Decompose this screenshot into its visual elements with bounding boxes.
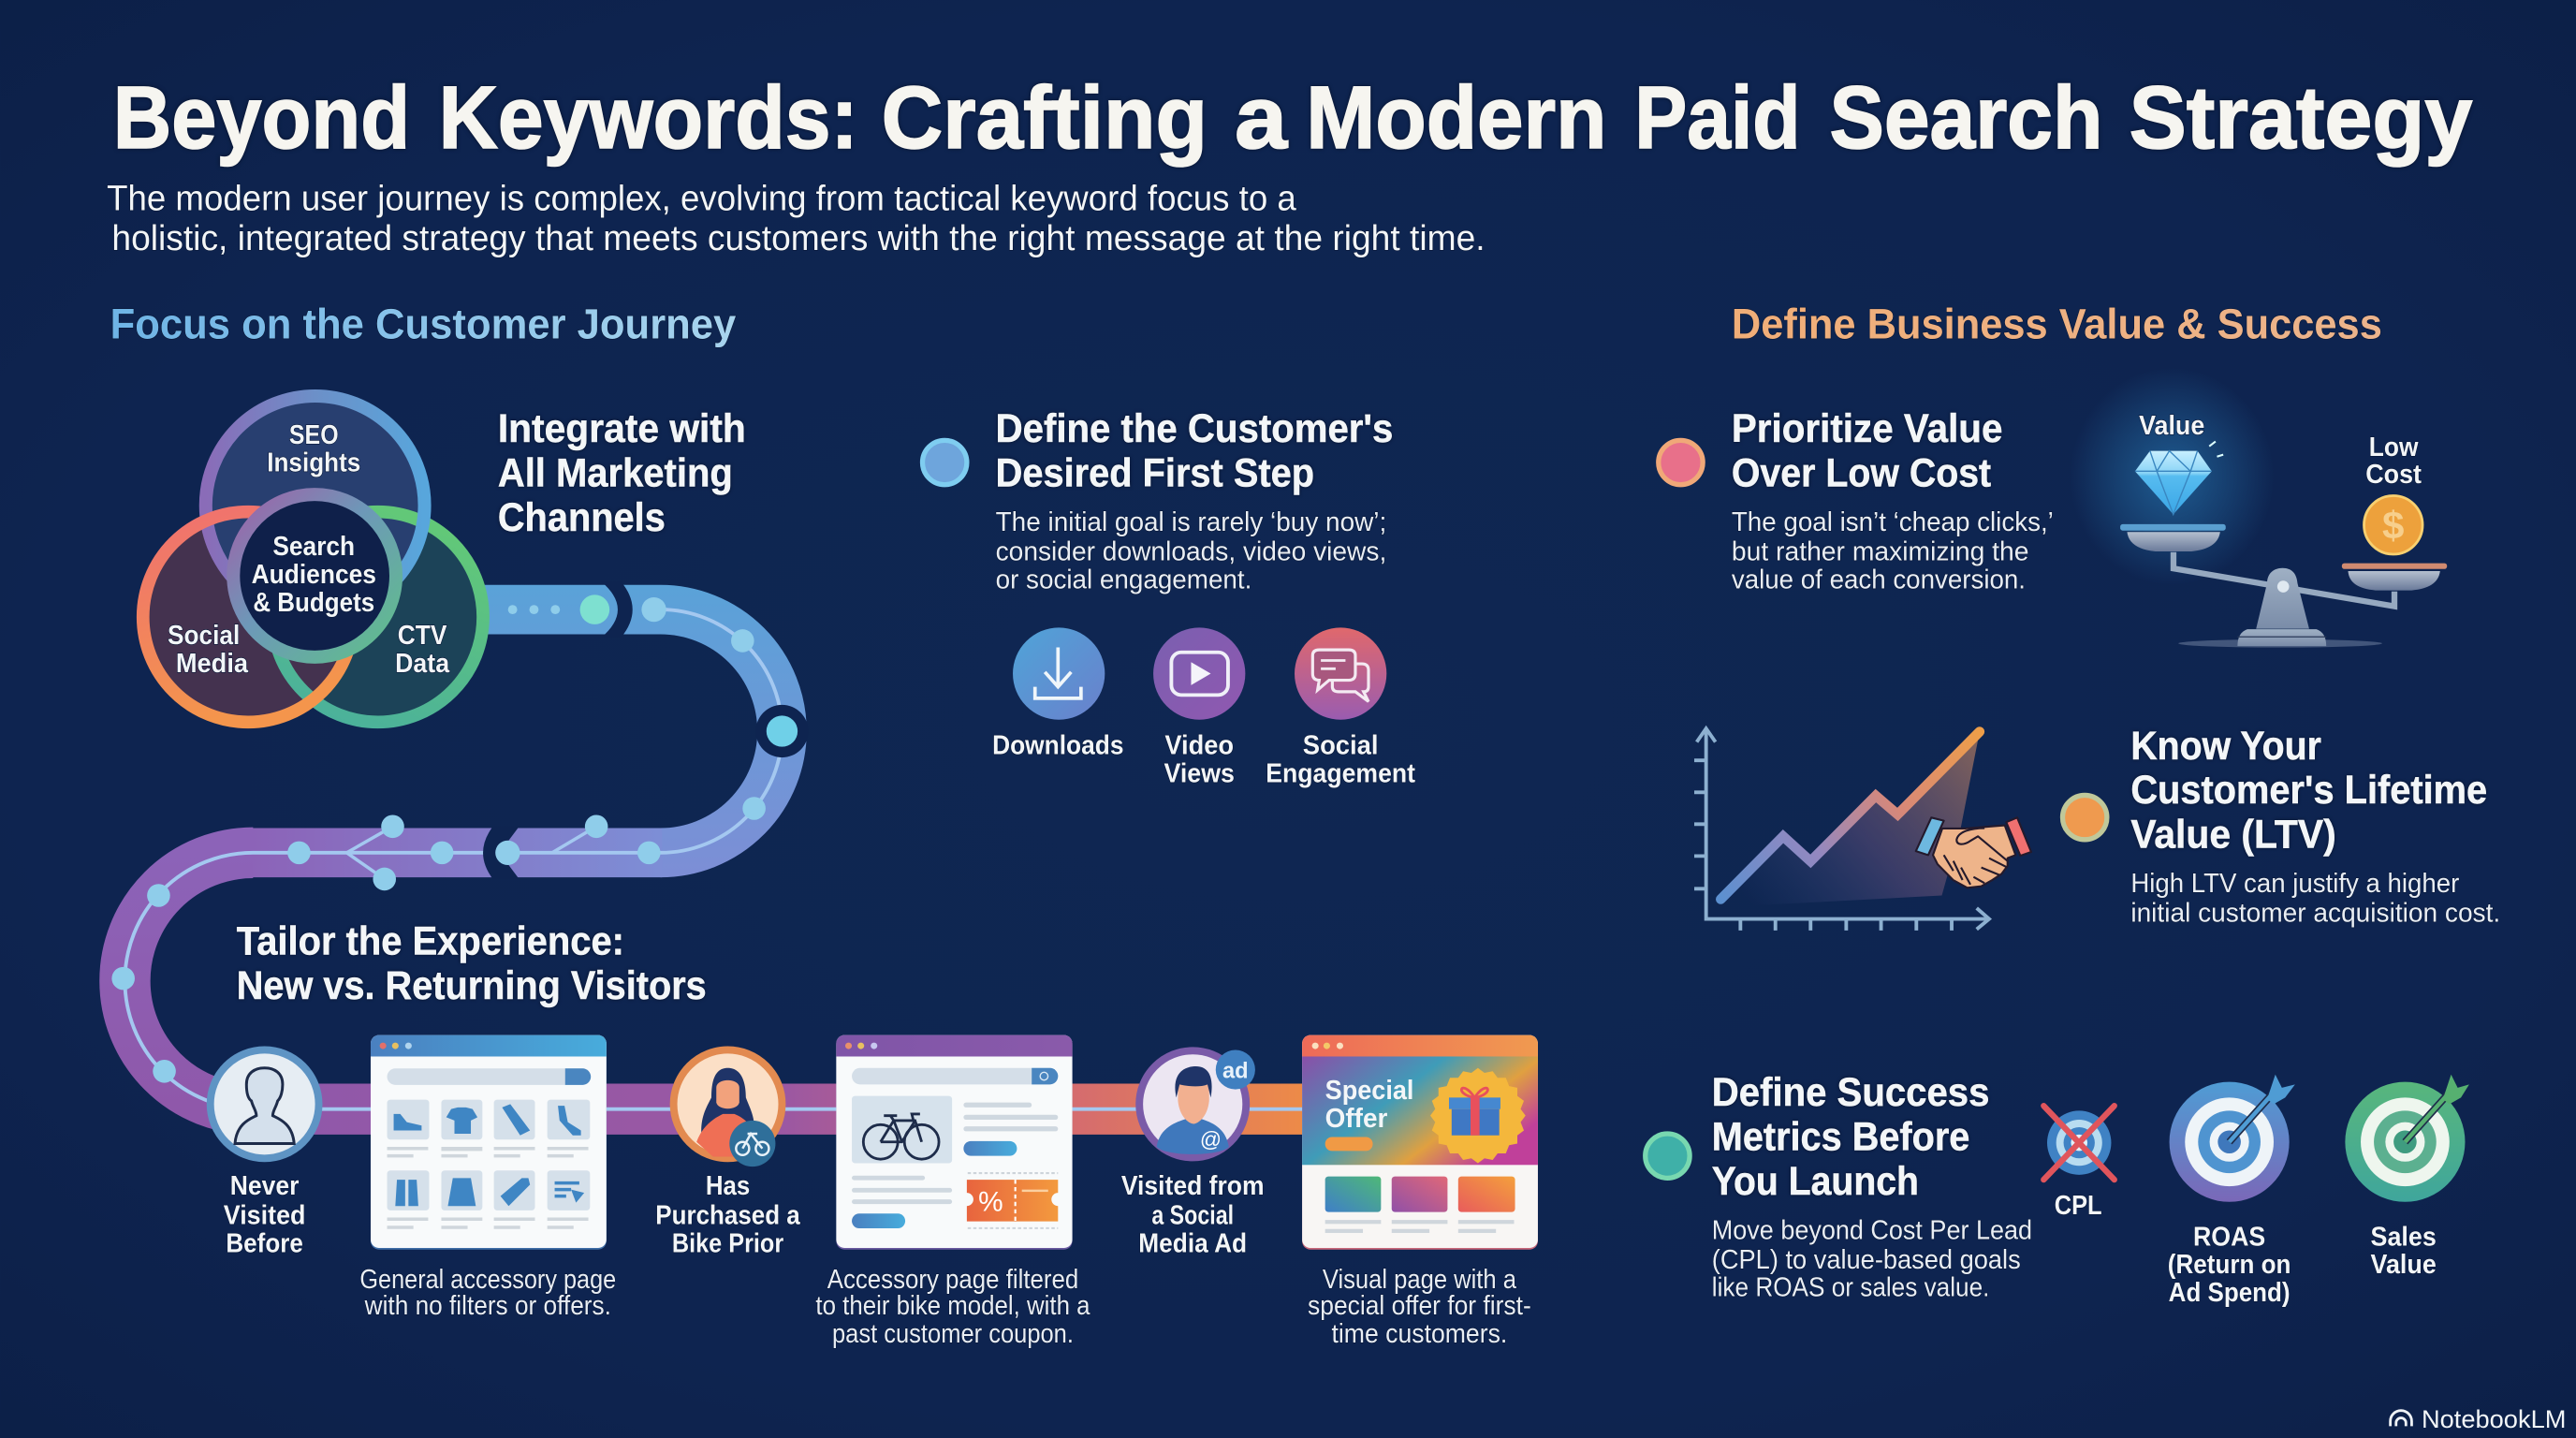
logo: NotebookLM: NotebookLM	[2422, 1404, 2566, 1433]
caption: special offer page: time customers.	[1332, 1319, 1507, 1349]
venn labels: Insights	[267, 448, 360, 478]
label: ROAS: ROAS	[2193, 1222, 2265, 1252]
bullet: first step	[923, 440, 967, 485]
heading: metrics: You Launch	[1712, 1159, 1919, 1204]
scale labels: Low	[2369, 433, 2419, 462]
avatar: new visitor	[211, 1049, 319, 1158]
body: ltv: High LTV can justify a higher	[2130, 869, 2459, 899]
icon: crossed-out target	[2043, 1106, 2115, 1180]
body: first step	[996, 507, 1386, 594]
heading: customer journey: Focus on the Customer Journey	[110, 301, 737, 348]
icon: balance scale	[2070, 368, 2447, 648]
body: first step: The initial goal is rarely ‘buy now’;	[996, 507, 1386, 537]
venn labels: SEO	[289, 420, 339, 450]
label: purchased: Purchased a	[655, 1200, 800, 1230]
title: Paid	[1634, 68, 1801, 168]
body: metrics: like ROAS or sales value.	[1712, 1273, 1989, 1303]
label: social ad: Visited from	[1121, 1171, 1265, 1201]
subtitle: holistic, integrated strategy that meets customers with the right message at the right time.	[111, 218, 1486, 257]
label: purchased: Has	[706, 1171, 750, 1201]
heading: metrics	[1712, 1070, 1989, 1204]
subtitle: The modern user journey is complex, evolving from tactical keyword focus to a	[107, 179, 1296, 218]
card: filtered page	[836, 1035, 1073, 1250]
heading: metrics: Metrics Before	[1712, 1115, 1969, 1160]
heading: first step: Define the Customer's	[996, 406, 1393, 451]
venn labels: Data	[395, 649, 449, 679]
heading: first step: Desired First Step	[996, 450, 1314, 495]
chart: rising value	[1694, 728, 2031, 931]
venn diagram: marketing channels	[143, 396, 483, 722]
label: sales value	[2371, 1222, 2437, 1280]
venn labels: Media	[176, 649, 248, 679]
card: special offer page	[1302, 1035, 1538, 1250]
diamond	[2135, 442, 2223, 514]
icon: sales value target	[2345, 1075, 2469, 1202]
body: metrics: Move beyond Cost Per Lead	[1712, 1215, 2032, 1245]
venn labels: Audiences	[252, 560, 376, 590]
icon labels: Engagement	[1266, 758, 1416, 788]
label: never visited: Before	[226, 1228, 303, 1258]
title	[113, 68, 2473, 168]
venn labels: Social	[168, 621, 240, 651]
coupon percent: %	[978, 1186, 1003, 1217]
venn labels: Search	[272, 532, 355, 562]
label: social ad	[1121, 1171, 1265, 1258]
panel: prioritize value	[1659, 368, 2447, 648]
label: purchased	[655, 1171, 800, 1258]
body: prioritize	[1732, 507, 2054, 594]
heading: ltv: Customer's Lifetime	[2130, 768, 2487, 813]
icon: social engagement	[1295, 627, 1386, 720]
icon: handshake	[1916, 817, 2031, 888]
title: Keywords:	[439, 68, 858, 168]
caption: general page: General accessory page	[359, 1265, 616, 1295]
title: Beyond	[113, 68, 410, 168]
heading: integrate: Integrate with	[498, 406, 746, 451]
icon labels: Social	[1303, 731, 1379, 761]
label: CPL: CPL	[2055, 1191, 2102, 1221]
bullet: ltv	[2062, 795, 2107, 840]
avatar: social visitor	[1139, 1049, 1255, 1157]
label: ROAS: (Return on	[2168, 1250, 2291, 1280]
coin: $	[2382, 504, 2404, 548]
scale labels: Value	[2139, 411, 2204, 441]
ring: CTV	[272, 512, 483, 722]
panel: success metrics	[1646, 1070, 2469, 1308]
heading: integrate: All Marketing	[498, 450, 733, 495]
heading: ltv: Know Your	[2130, 724, 2321, 769]
body: first step: or social engagement.	[996, 565, 1251, 594]
caption: special offer page: special offer for first-	[1308, 1291, 1531, 1321]
venn labels	[168, 420, 449, 679]
venn labels: & Budgets	[253, 588, 374, 618]
ring: social	[143, 512, 353, 722]
caption: filtered page: Accessory page filtered	[827, 1265, 1078, 1295]
label: social ad: Media Ad	[1138, 1228, 1247, 1258]
circle: search core	[233, 494, 396, 657]
special offer text	[1325, 1076, 1413, 1134]
icon: ROAS target	[2170, 1075, 2295, 1202]
icon: video views	[1153, 627, 1245, 720]
heading: integrate: Channels	[498, 495, 666, 540]
caption: filtered page: past customer coupon.	[832, 1319, 1074, 1349]
heading: tailor experience: Tailor the Experience:	[237, 919, 624, 964]
avatar: returning customer	[674, 1049, 782, 1167]
special offer text: Special	[1325, 1076, 1413, 1106]
label: sales value: Value	[2371, 1250, 2437, 1280]
caption: general page: with no filters or offers.	[364, 1291, 611, 1321]
label: never visited: Never	[230, 1171, 299, 1201]
ring: SEO	[206, 396, 425, 615]
label: never visited	[224, 1171, 305, 1258]
label: social ad: a Social	[1151, 1200, 1234, 1230]
at-sign badge: @	[1200, 1127, 1222, 1152]
icon labels: Video	[1164, 731, 1234, 761]
heading: prioritize: Over Low Cost	[1732, 450, 1991, 495]
special offer text: Offer	[1325, 1104, 1387, 1134]
caption: filtered page	[815, 1265, 1090, 1349]
title: Search	[1829, 68, 2102, 168]
body: metrics: (CPL) to value-based goals	[1712, 1245, 2021, 1275]
body: metrics	[1712, 1215, 2032, 1303]
heading: metrics: Define Success	[1712, 1070, 1989, 1115]
icon: downloads	[1013, 627, 1105, 720]
label: purchased: Bike Prior	[672, 1228, 783, 1258]
heading: business value: Define Business Value & Success	[1732, 301, 2382, 348]
title: Strategy	[2130, 68, 2473, 168]
panel: first step	[923, 406, 1416, 788]
scale labels	[2139, 411, 2422, 490]
bullet: metrics	[1646, 1134, 1690, 1178]
heading: tailor experience	[237, 919, 707, 1008]
subtitle	[107, 179, 1486, 257]
icon labels	[992, 731, 1416, 788]
caption: special offer page	[1308, 1265, 1531, 1349]
heading: tailor experience: New vs. Returning Visitors	[237, 963, 707, 1008]
body: prioritize: but rather maximizing the	[1732, 536, 2029, 566]
journey ribbon path	[111, 581, 1314, 1109]
heading: ltv	[2130, 724, 2487, 858]
body: ltv	[2130, 869, 2500, 929]
coin	[2364, 495, 2422, 554]
card: general accessory page	[371, 1035, 607, 1250]
venn labels: CTV	[398, 621, 446, 651]
title: Crafting	[882, 68, 1208, 168]
title: Modern	[1306, 68, 1606, 168]
icon labels: Views	[1164, 758, 1235, 788]
caption: filtered page: to their bike model, with a	[815, 1291, 1090, 1321]
label: sales value: Sales	[2371, 1222, 2437, 1252]
label: never visited: Visited	[224, 1200, 305, 1230]
caption: special offer page: Visual page with a	[1323, 1265, 1516, 1295]
label: ROAS	[2168, 1222, 2291, 1308]
heading: prioritize	[1732, 406, 2002, 495]
heading: ltv: Value (LTV)	[2130, 813, 2336, 858]
heading: prioritize: Prioritize Value	[1732, 406, 2002, 451]
scale labels: Cost	[2365, 460, 2422, 490]
body: prioritize: The goal isn’t ‘cheap clicks,’	[1732, 507, 2054, 537]
panel: lifetime value	[1694, 724, 2500, 931]
region fills	[143, 396, 483, 722]
icon labels: Downloads	[992, 731, 1123, 761]
title: a	[1235, 68, 1288, 168]
caption: general page	[359, 1265, 616, 1321]
body: first step: consider downloads, video views,	[996, 536, 1386, 566]
heading: integrate	[498, 406, 746, 540]
body: prioritize: value of each conversion.	[1732, 565, 2026, 594]
ad badge: ad	[1222, 1059, 1249, 1083]
body: ltv: initial customer acquisition cost.	[2130, 899, 2500, 929]
heading: first step	[996, 406, 1393, 495]
bullet: prioritize	[1659, 440, 1703, 485]
label: ROAS: Ad Spend)	[2169, 1278, 2291, 1308]
